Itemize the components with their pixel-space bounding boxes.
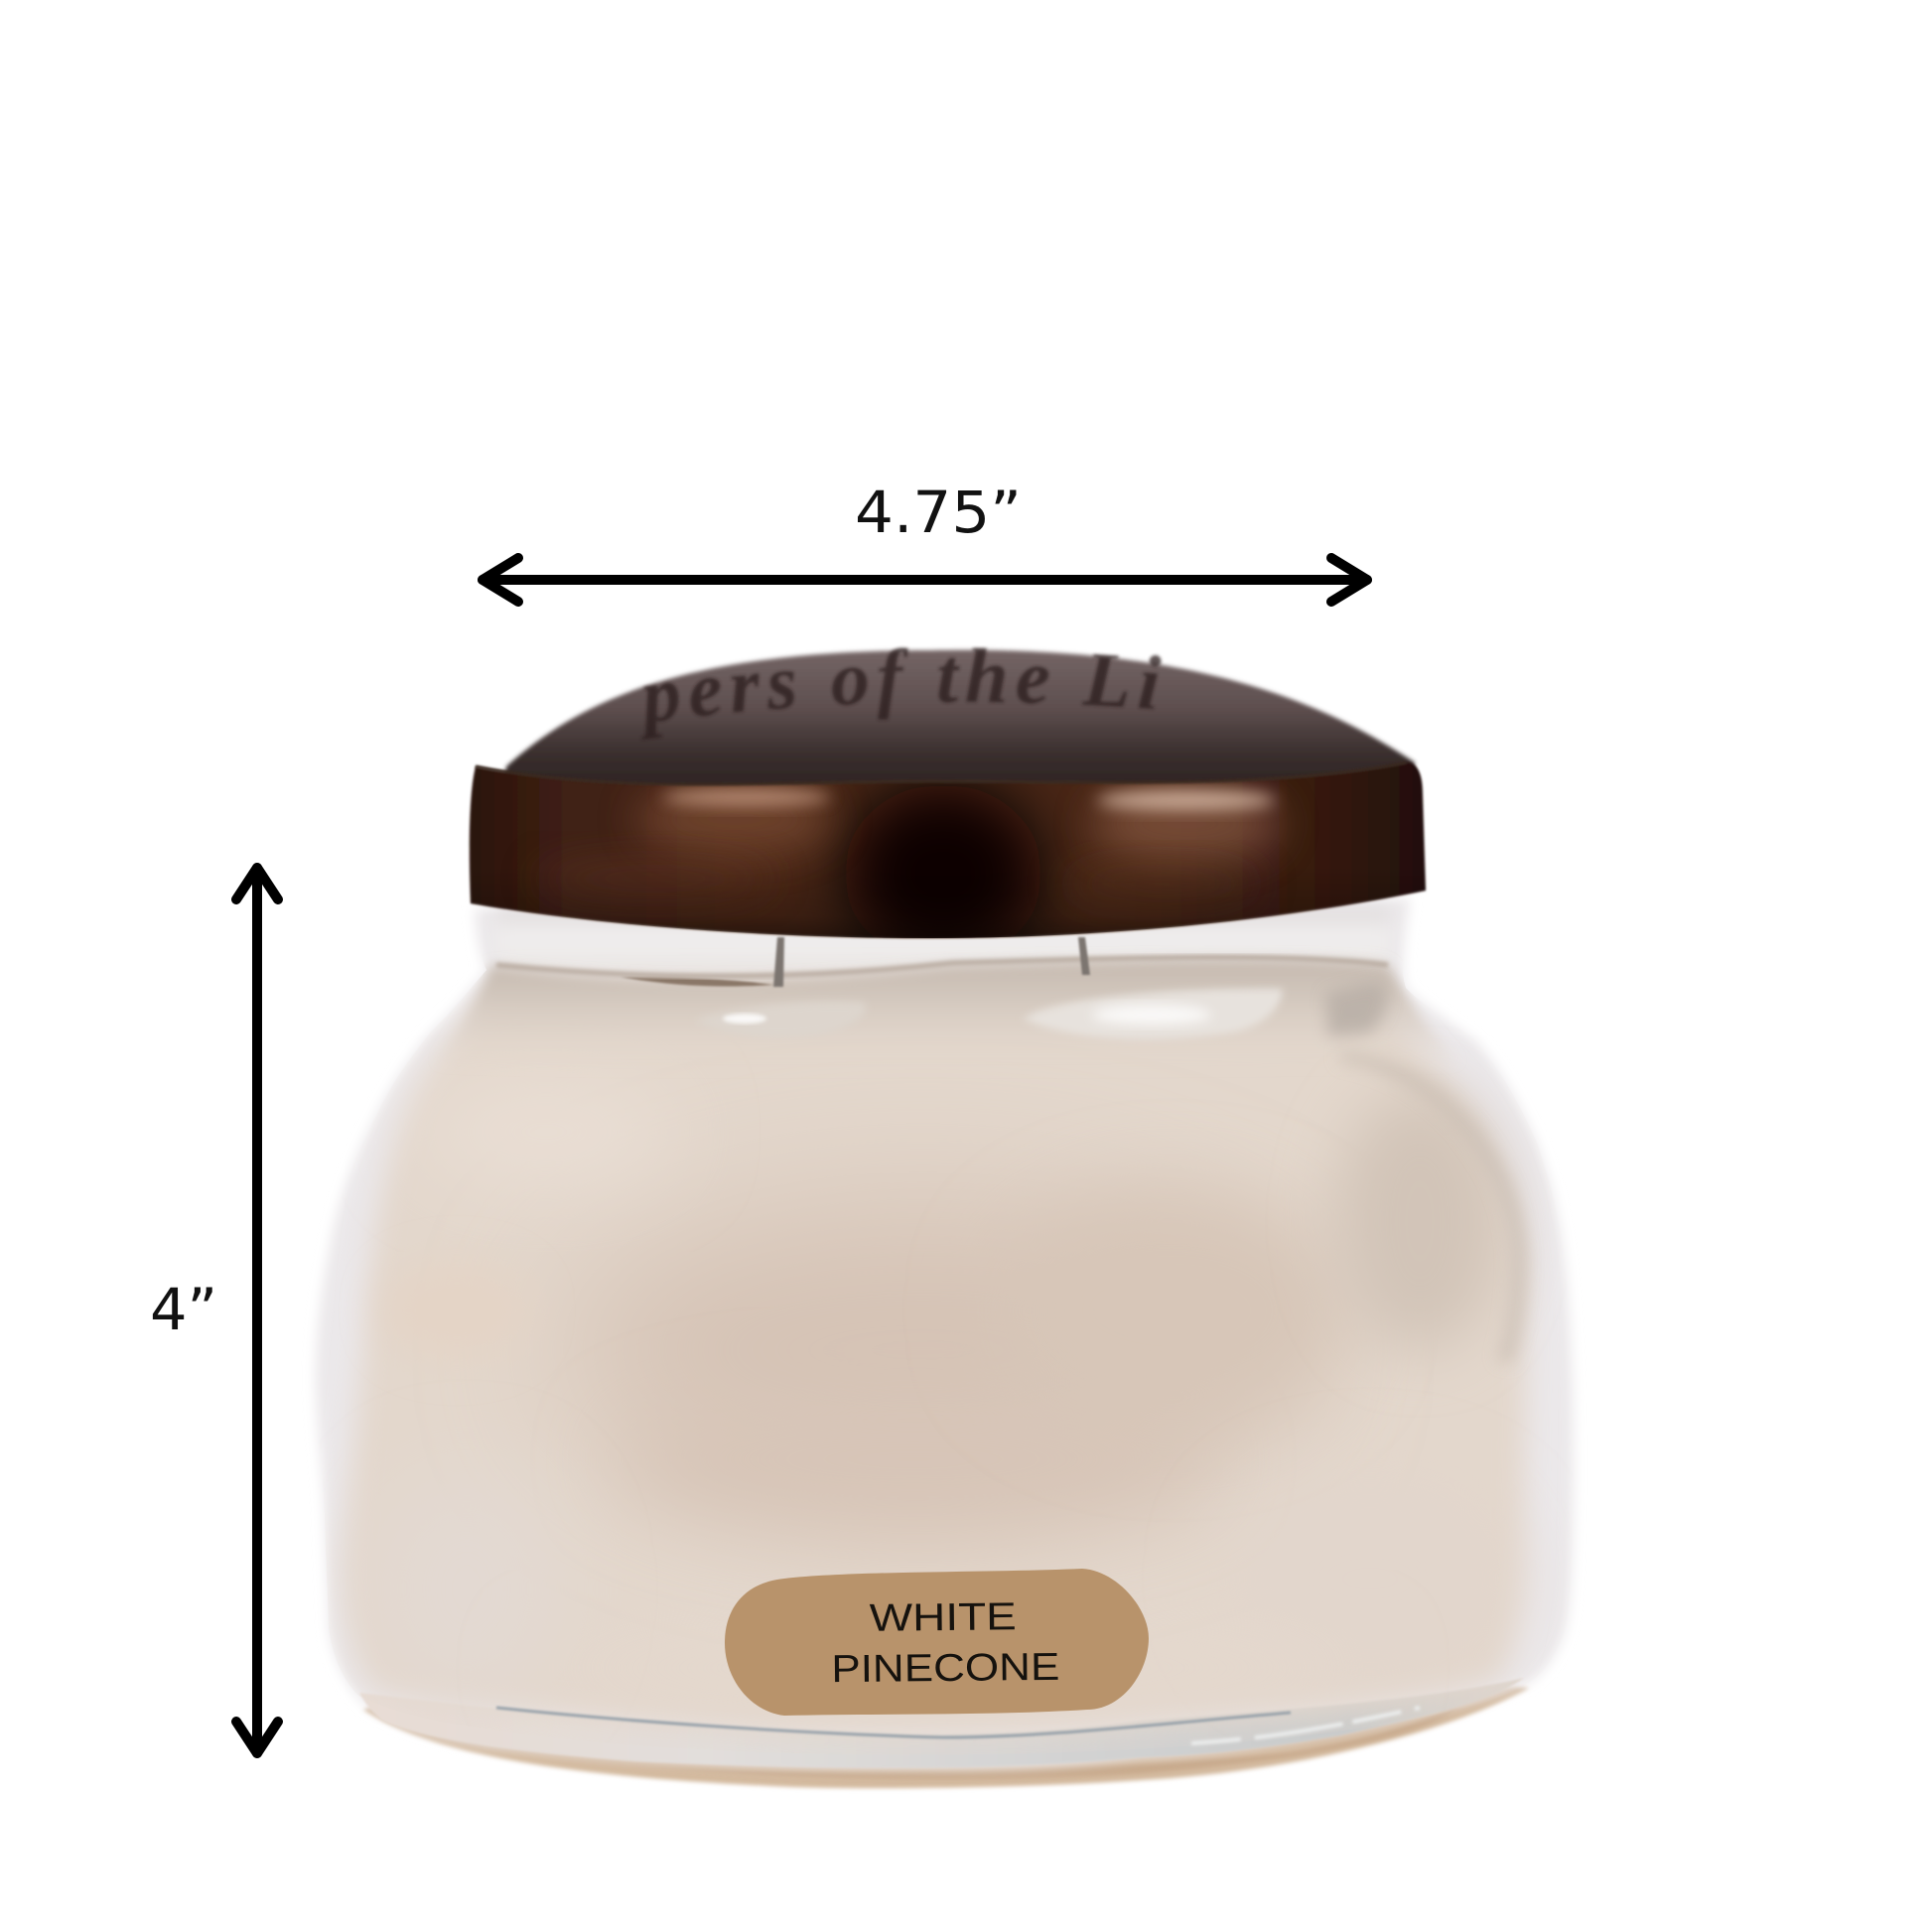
glass jar body	[316, 898, 1574, 1769]
label text: PINECONE	[831, 1646, 1060, 1691]
right wax edge shade	[1340, 1054, 1519, 1362]
warm left lobe	[382, 1261, 531, 1360]
height arrow	[236, 868, 278, 1753]
glass base blue line	[496, 1708, 1291, 1737]
infographic: candle jar with dimensions	[153, 490, 1576, 1791]
top wax edge line	[496, 957, 1388, 976]
lower light wax	[367, 1469, 566, 1708]
lid	[468, 645, 1428, 940]
lower right light wax	[1231, 1479, 1509, 1678]
width label: 4.75”	[855, 479, 1022, 546]
dark wax rim shadow	[621, 977, 774, 986]
upper light wax	[417, 1077, 675, 1186]
centre dark patch	[844, 784, 1042, 963]
right mid wax	[1134, 1196, 1339, 1386]
bottom shading	[471, 774, 1426, 941]
rim tones	[471, 774, 1426, 963]
bottom light wax	[536, 1623, 1370, 1713]
right highlight	[1097, 790, 1276, 810]
left bright highlight	[723, 1014, 766, 1024]
highlight pools	[1023, 989, 1283, 1039]
glass base	[359, 1678, 1524, 1768]
wax base colour	[344, 978, 1527, 1733]
wax top surface	[462, 953, 1438, 1048]
glass base white streaks	[1191, 1708, 1420, 1743]
label shape	[725, 1569, 1149, 1716]
tan shadow under jar	[363, 1682, 1529, 1788]
candle jar	[276, 592, 1576, 1791]
wax fill	[344, 957, 1527, 1733]
wick right	[1078, 937, 1090, 975]
label text	[831, 1595, 1060, 1691]
lid rim	[470, 762, 1426, 938]
right bright highlight	[1092, 1005, 1211, 1025]
glass neck	[496, 908, 1390, 973]
mid darker wax	[679, 1468, 1123, 1509]
label text: WHITE	[870, 1595, 1017, 1640]
product label	[725, 1569, 1149, 1716]
right corner shadow	[1325, 982, 1388, 1036]
rim upper ridge	[476, 762, 1407, 784]
right lower brush tone	[1062, 864, 1261, 903]
central darker wax	[570, 1179, 1040, 1426]
height label: 4”	[150, 1276, 217, 1343]
darker shadow strip	[635, 1706, 1459, 1779]
right darker lobe	[1335, 1092, 1504, 1350]
left lower brush tone	[536, 857, 774, 900]
left highlight	[662, 788, 831, 806]
left highlight pool	[695, 1002, 866, 1037]
lid dome	[501, 650, 1415, 794]
wick left	[773, 937, 784, 987]
left copper glow	[635, 781, 834, 857]
width arrow	[483, 558, 1367, 602]
embossed lid lettering: pers of the Li	[641, 645, 1164, 740]
right copper glow	[1092, 784, 1281, 864]
